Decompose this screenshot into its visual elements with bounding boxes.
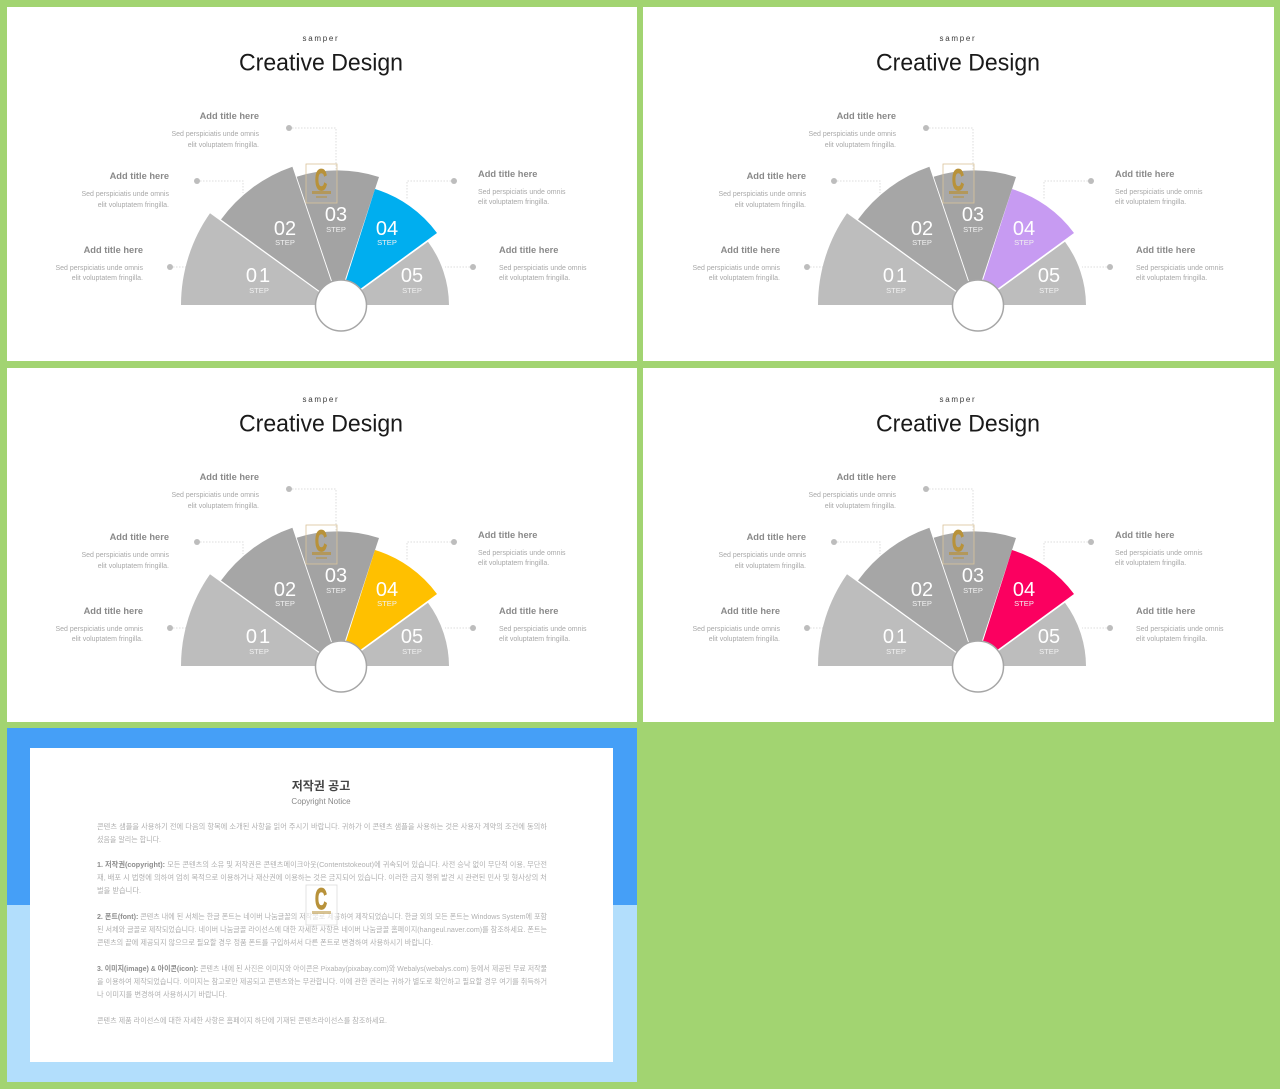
segment 04 highlighted — [978, 550, 1074, 656]
step 01 label: STEP — [886, 286, 906, 295]
text block top: elit voluptatem fringilla. — [825, 142, 896, 149]
panel: design variant blue — [7, 7, 637, 361]
section 2 font — [97, 911, 547, 947]
text block right lower: elit voluptatem fringilla. — [499, 636, 570, 643]
text block right upper: Sed perspiciatis unde omnis — [478, 189, 566, 196]
watermark logo — [943, 525, 974, 564]
text block right upper: Sed perspiciatis unde omnis — [1115, 189, 1203, 196]
step 03 label: STEP — [326, 586, 346, 595]
segment 01 — [181, 574, 330, 666]
text block top: Add title here — [200, 111, 259, 121]
segment 03 — [297, 531, 379, 656]
text block top: Sed perspiciatis unde omnis — [171, 492, 259, 499]
panel: design variant yellow — [7, 368, 637, 722]
watermark logo: C — [315, 164, 327, 197]
text block right upper: elit voluptatem fringilla. — [478, 560, 549, 567]
text block left upper: elit voluptatem fringilla. — [98, 202, 169, 209]
notice heading: 저작권 공고 — [292, 778, 350, 793]
title: Creative Design — [876, 410, 1040, 438]
text block left upper: elit voluptatem fringilla. — [98, 563, 169, 570]
step 05 label: STEP — [1039, 286, 1059, 295]
text block top — [171, 472, 259, 510]
watermark logo — [306, 525, 337, 564]
leader lines — [170, 489, 473, 628]
text block top: elit voluptatem fringilla. — [188, 503, 259, 510]
text block left lower — [692, 606, 780, 643]
step 03 label: STEP — [326, 225, 346, 234]
step 01 label: 01 — [246, 626, 272, 648]
text block top: Add title here — [200, 472, 259, 482]
text block right lower: elit voluptatem fringilla. — [1136, 275, 1207, 282]
text block right lower: Sed perspiciatis unde omnis — [1136, 626, 1224, 633]
text block top: elit voluptatem fringilla. — [825, 503, 896, 510]
text block top: Add title here — [837, 111, 896, 121]
step 02 label: 02 — [274, 218, 296, 240]
text block right upper: elit voluptatem fringilla. — [1115, 199, 1186, 206]
text block top: Sed perspiciatis unde omnis — [171, 131, 259, 138]
center circle — [316, 641, 366, 692]
text block right upper: elit voluptatem fringilla. — [1115, 560, 1186, 567]
text block left lower — [55, 245, 143, 282]
callout dots — [804, 125, 1113, 270]
watermark logo — [943, 164, 974, 203]
section 2 font: 콘텐츠의 끝에 제공되지 않으므로 필요할 경우 정품 폰트를 구입하셔서 다른 폰트로 변경하여 사용하시기 바랍니다. — [97, 937, 433, 947]
text block right lower — [499, 245, 587, 282]
watermark logo: C — [315, 883, 327, 916]
step 03 label: 03 — [962, 565, 984, 587]
step 03 label: STEP — [963, 225, 983, 234]
panel: design variant pink — [643, 368, 1274, 722]
step 05 label: STEP — [1039, 647, 1059, 656]
section 1 copyright: 1. 저작권(copyright): 모든 콘텐츠의 소유 및 저작권은 콘텐츠메이크아웃(Contentstokeout)에 귀속되어 있습니다. 사전 승낙 없이 무단적 이용, 무단전 — [97, 859, 547, 869]
step 03 label: 03 — [962, 204, 984, 226]
step 04 label: STEP — [377, 238, 397, 247]
step 03 label: STEP — [963, 586, 983, 595]
text block right upper: elit voluptatem fringilla. — [478, 199, 549, 206]
segment 01 — [818, 213, 967, 305]
text block right lower — [1136, 606, 1224, 643]
title: Creative Design — [239, 410, 403, 438]
text block left upper: Add title here — [110, 532, 169, 542]
eyebrow label: samper — [940, 34, 976, 43]
step 01 label: STEP — [886, 647, 906, 656]
text block right upper: Add title here — [478, 530, 537, 540]
text block right lower — [1136, 245, 1224, 282]
watermark logo — [306, 883, 337, 925]
text block right lower — [499, 606, 587, 643]
step 02 label: STEP — [912, 599, 932, 608]
text block left upper: elit voluptatem fringilla. — [735, 202, 806, 209]
segment 01 — [818, 574, 967, 666]
step 01 label: STEP — [249, 286, 269, 295]
section 3 image and icon: 나 이미지를 변경하여 사용하시기 바랍니다. — [97, 989, 227, 999]
text block top: elit voluptatem fringilla. — [188, 142, 259, 149]
text block left lower: elit voluptatem fringilla. — [709, 636, 780, 643]
segment 02 — [858, 167, 973, 295]
text block left upper: Add title here — [110, 171, 169, 181]
text block right upper: Add title here — [1115, 530, 1174, 540]
text block top — [808, 111, 896, 149]
step 05 label: 05 — [401, 265, 423, 287]
leader lines — [807, 489, 1110, 628]
text block left upper: Sed perspiciatis unde omnis — [718, 191, 806, 198]
watermark logo: C — [952, 525, 964, 558]
section 2 font: 된 서체와 글꼴로 제작되었습니다. 네이버 나눔글꼴 라이선스에 대한 자세한 사항은 네이버 나눔글꼴 홈페이지(hangeul.naver.com)를 참조하세요. 폰트는 — [97, 924, 547, 934]
text block left lower — [55, 606, 143, 643]
step 02 label: 02 — [274, 579, 296, 601]
text block right upper — [1115, 530, 1203, 567]
segment 02 — [221, 167, 336, 295]
section 2 font: 2. 폰트(font): 콘텐츠 내에 된 서체는 한글 폰트는 네이버 나눔글꼴의 저작물로 제공하여 제작되었습니다. 한글 외의 모든 폰트는 Windows System에 포함 — [97, 911, 547, 921]
segment 04 highlighted — [341, 550, 437, 656]
text block left upper: Sed perspiciatis unde omnis — [718, 552, 806, 559]
text block left upper — [81, 171, 169, 209]
step 04 label: STEP — [1014, 599, 1034, 608]
text block top: Add title here — [837, 472, 896, 482]
intro paragraph — [97, 821, 547, 844]
text block top: Sed perspiciatis unde omnis — [808, 131, 896, 138]
text block top — [808, 472, 896, 510]
text block right upper: Add title here — [478, 169, 537, 179]
text block left lower: Sed perspiciatis unde omnis — [55, 626, 143, 633]
center circle — [952, 641, 1004, 692]
text block left lower: elit voluptatem fringilla. — [72, 636, 143, 643]
intro paragraph: 콘텐츠 샘플을 사용하기 전에 다음의 항목에 소개된 사항을 읽어 주시기 바랍니다. 귀하가 이 콘텐츠 샘플을 사용하는 것은 사용자 계약의 조건에 동의하 — [97, 821, 547, 831]
text block left lower: Sed perspiciatis unde omnis — [55, 265, 143, 272]
text block left upper: elit voluptatem fringilla. — [735, 563, 806, 570]
step 04 label: 04 — [376, 579, 398, 601]
text block right lower: elit voluptatem fringilla. — [1136, 636, 1207, 643]
closing line: 콘텐츠 제품 라이선스에 대한 자세한 사항은 홈페이지 하단에 기재된 콘텐츠라이선스를 참조하세요. — [97, 1015, 387, 1025]
intro paragraph: 셨음을 알리는 합니다. — [97, 834, 161, 844]
text block right lower: Sed perspiciatis unde omnis — [499, 265, 587, 272]
text block right lower: elit voluptatem fringilla. — [499, 275, 570, 282]
step 02 label: 02 — [911, 218, 933, 240]
center circle — [952, 280, 1004, 331]
notice subheading: Copyright Notice — [291, 797, 351, 806]
segment 04 highlighted — [341, 189, 437, 295]
step 04 label: 04 — [1013, 218, 1035, 240]
segment 03 — [934, 531, 1016, 656]
step 01 label: STEP — [249, 647, 269, 656]
segment 03 — [934, 170, 1016, 295]
text block left lower: Sed perspiciatis unde omnis — [692, 265, 780, 272]
step 01 label: 01 — [883, 265, 909, 287]
section 1 copyright: 벌을 받습니다. — [97, 885, 141, 895]
section 1 copyright — [97, 859, 547, 895]
text block right upper — [478, 530, 566, 567]
leader lines — [807, 128, 1110, 267]
text block left lower: elit voluptatem fringilla. — [72, 275, 143, 282]
callout dots — [167, 486, 476, 631]
step 05 label: 05 — [401, 626, 423, 648]
text block left lower: Add title here — [721, 245, 780, 255]
step 05 label: STEP — [402, 286, 422, 295]
text block right upper — [478, 169, 566, 206]
text block left lower: Add title here — [84, 245, 143, 255]
text block right upper: Sed perspiciatis unde omnis — [478, 550, 566, 557]
segment 05 — [352, 603, 449, 666]
eyebrow label: samper — [940, 395, 976, 404]
section 1 copyright: 재, 배포 시 법령에 의하여 엄히 목적으로 이용하거나 재산권에 이용하는 것은 금지되어 있습니다. 이러한 금지 행위 발견 시 관련된 민사 및 형사상의 처 — [97, 872, 547, 882]
callout dots — [804, 486, 1113, 631]
text block left lower: Sed perspiciatis unde omnis — [692, 626, 780, 633]
text block right lower: Sed perspiciatis unde omnis — [1136, 265, 1224, 272]
step 04 label: 04 — [1013, 579, 1035, 601]
text block left lower: Add title here — [84, 606, 143, 616]
text block left upper — [718, 171, 806, 209]
callout dots — [167, 125, 476, 270]
step 03 label: 03 — [325, 204, 347, 226]
text block right upper: Add title here — [1115, 169, 1174, 179]
segment 04 highlighted — [978, 189, 1074, 295]
center circle — [316, 280, 366, 331]
text block right upper: Sed perspiciatis unde omnis — [1115, 550, 1203, 557]
panel: design variant purple — [643, 7, 1274, 361]
eyebrow label: samper — [303, 34, 339, 43]
panel: copyright notice — [7, 728, 637, 1082]
step 04 label: 04 — [376, 218, 398, 240]
step 05 label: STEP — [402, 647, 422, 656]
leader lines — [170, 128, 473, 267]
watermark logo: C — [952, 164, 964, 197]
step 01 label: 01 — [246, 265, 272, 287]
segment 05 — [989, 242, 1086, 305]
step 02 label: STEP — [275, 238, 295, 247]
text block left upper: Sed perspiciatis unde omnis — [81, 191, 169, 198]
text block right upper — [1115, 169, 1203, 206]
segment 03 — [297, 170, 379, 295]
text block right lower: Add title here — [1136, 245, 1195, 255]
step 02 label: 02 — [911, 579, 933, 601]
text block left upper: Sed perspiciatis unde omnis — [81, 552, 169, 559]
text block left lower: Add title here — [721, 606, 780, 616]
step 04 label: STEP — [1014, 238, 1034, 247]
text block right lower: Sed perspiciatis unde omnis — [499, 626, 587, 633]
title: Creative Design — [239, 50, 403, 76]
text block top — [171, 111, 259, 149]
text block left upper — [718, 532, 806, 570]
segment 05 — [352, 242, 449, 305]
segment 05 — [989, 603, 1086, 666]
eyebrow label: samper — [303, 395, 339, 404]
segment 02 — [221, 528, 336, 656]
text block right lower: Add title here — [499, 245, 558, 255]
text block top: Sed perspiciatis unde omnis — [808, 492, 896, 499]
section 3 image and icon: 을 이용하여 제작되었습니다. 이미지는 참고로만 제공되고 콘텐츠와는 무관합니다. 이에 관한 권리는 귀하가 별도로 확인하고 필요할 경우 여기를 취득하거 — [97, 976, 547, 986]
section 3 image and icon — [97, 963, 547, 999]
text block left lower — [692, 245, 780, 282]
step 02 label: STEP — [912, 238, 932, 247]
watermark logo: C — [315, 525, 327, 558]
section 3 image and icon: 3. 이미지(image) & 아이콘(icon): 콘텐츠 내에 된 사진은 이미지와 아이콘은 Pixabay(pixabay.com)와 Webalys(webalys.com) 등에서 제공된 무료 저작물 — [97, 963, 547, 973]
watermark logo — [306, 164, 337, 203]
step 04 label: STEP — [377, 599, 397, 608]
text block left upper — [81, 532, 169, 570]
title: Creative Design — [876, 50, 1040, 76]
text block left lower: elit voluptatem fringilla. — [709, 275, 780, 282]
step 03 label: 03 — [325, 565, 347, 587]
step 02 label: STEP — [275, 599, 295, 608]
text block right lower: Add title here — [499, 606, 558, 616]
step 01 label: 01 — [883, 626, 909, 648]
segment 02 — [858, 528, 973, 656]
text block left upper: Add title here — [747, 171, 806, 181]
text block right lower: Add title here — [1136, 606, 1195, 616]
segment 01 — [181, 213, 330, 305]
text block left upper: Add title here — [747, 532, 806, 542]
step 05 label: 05 — [1038, 265, 1060, 287]
step 05 label: 05 — [1038, 626, 1060, 648]
